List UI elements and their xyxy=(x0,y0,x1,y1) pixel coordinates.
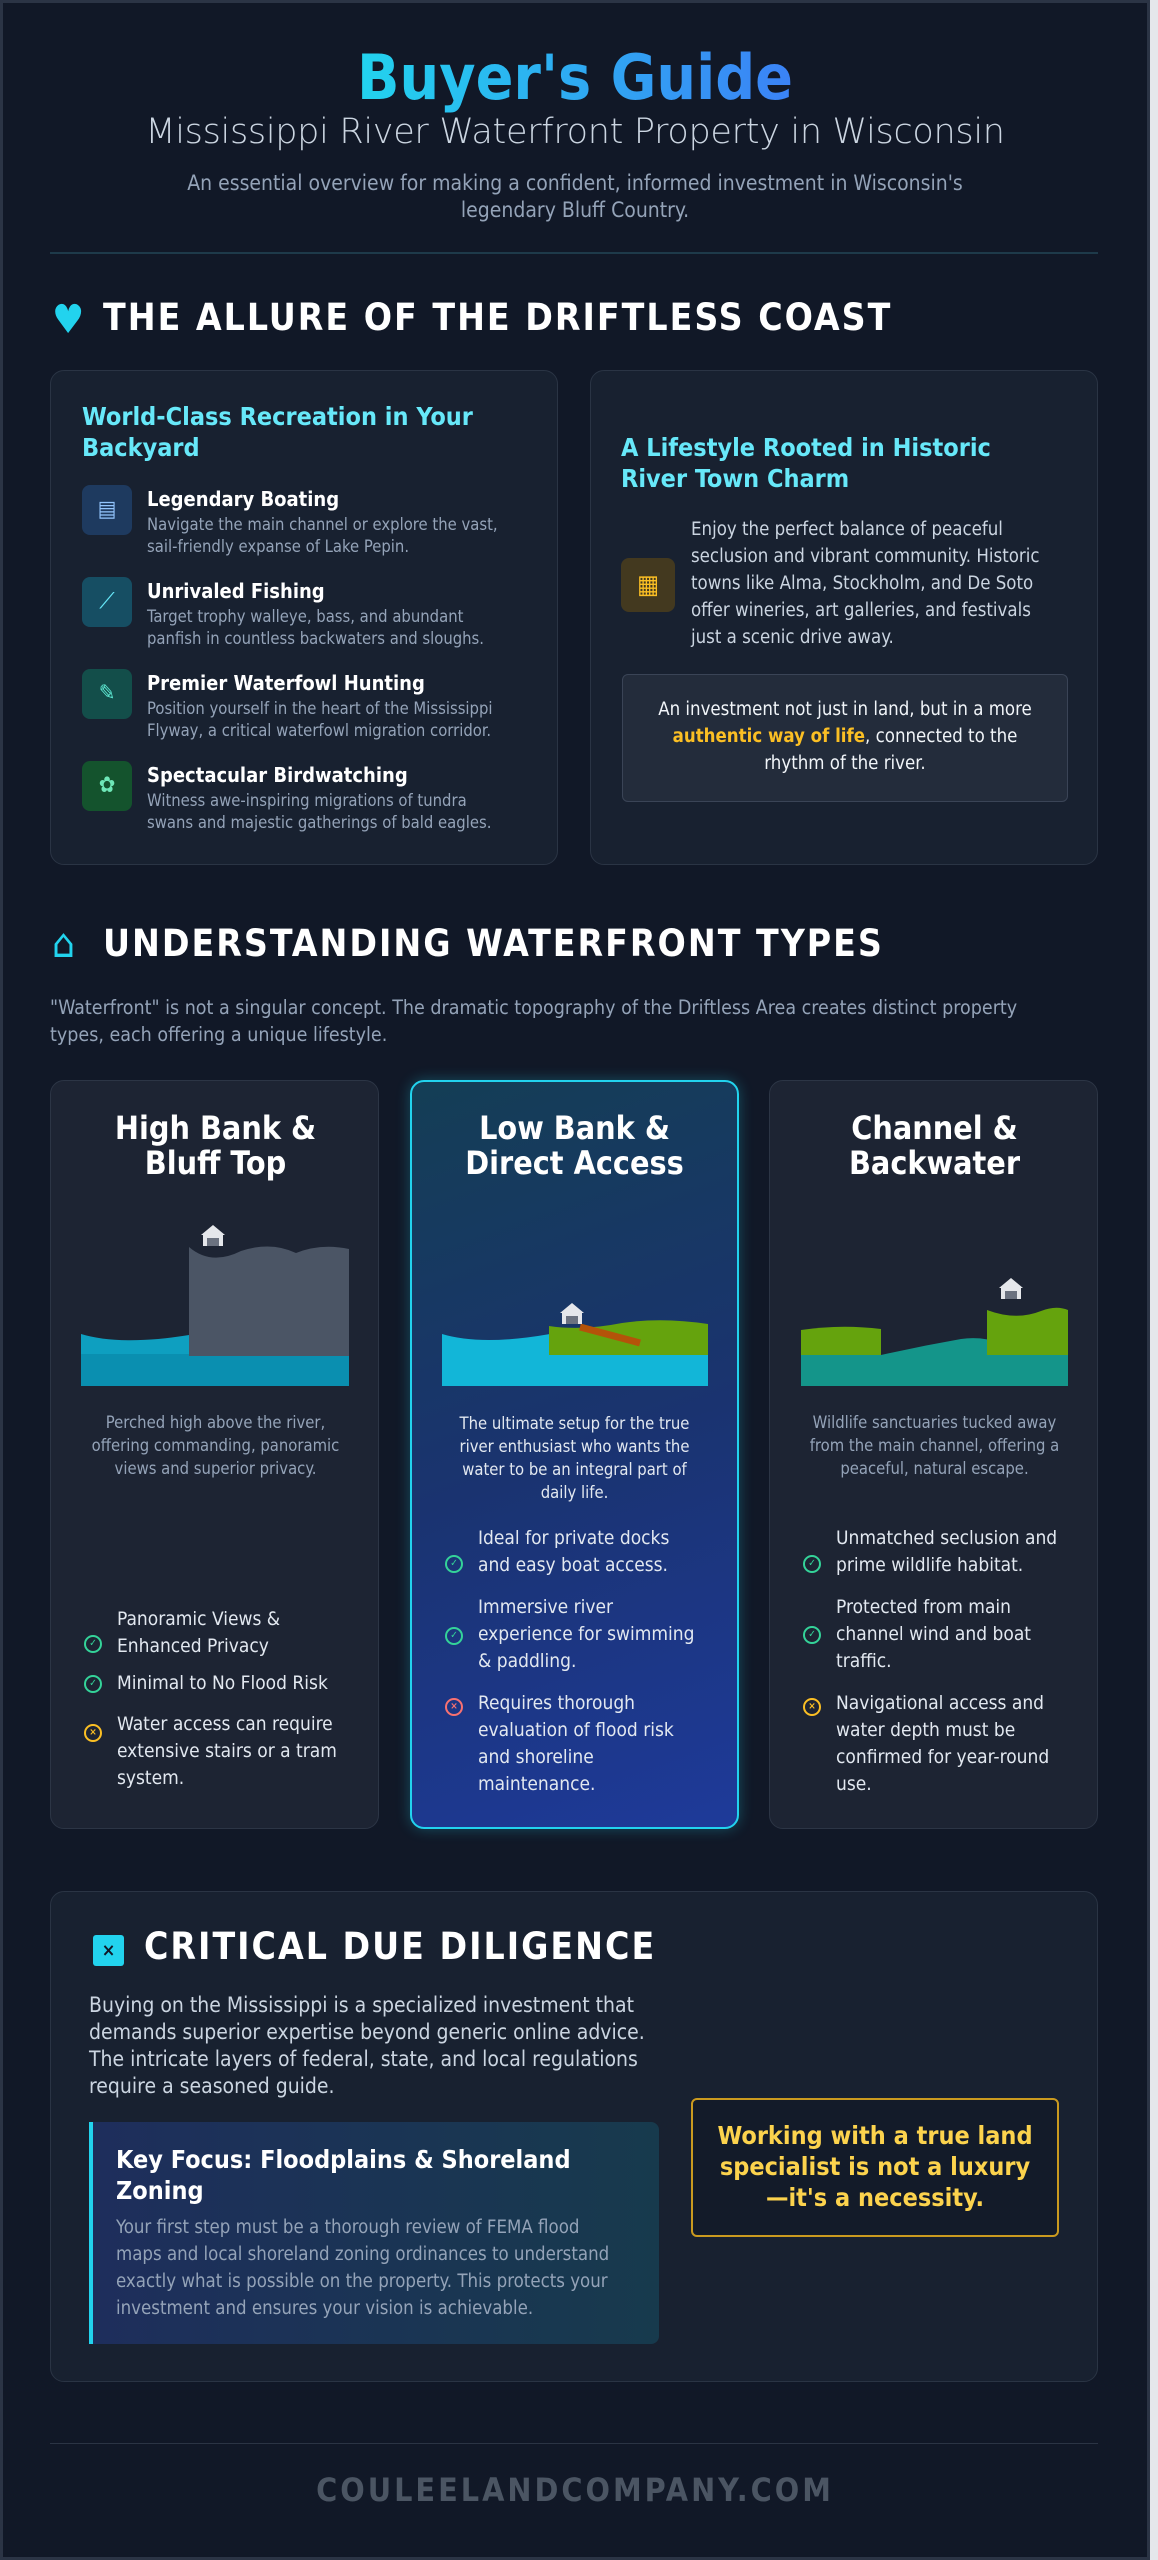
icon: x box: × xyxy=(102,1940,115,1961)
bullets: Unmatched seclusion and xyxy=(836,1527,1057,1549)
card title xyxy=(115,1109,316,1182)
card title xyxy=(465,1109,684,1182)
item: boating: Legendary Boating xyxy=(147,487,339,511)
subtitle: Mississippi River Waterfront Property in Wisconsin xyxy=(145,112,1005,152)
card description: Wildlife sanctuaries tucked away from the main channel, offering a peaceful, natural escape. xyxy=(810,1413,1059,1478)
intro paragraph: Buying on the Mississippi is a specialized investment that demands superior expertise beyond generic online advice. The intricate layers of federal, state, and local regulations require a seasoned guide. xyxy=(89,1993,645,2098)
icon: building: ▦ xyxy=(637,570,659,600)
bullets: prime wildlife habitat. xyxy=(836,1554,1023,1576)
callout: key focus: Key Focus: Floodplains & Shoreland Zoning xyxy=(116,2145,571,2205)
card title: Direct Access xyxy=(465,1144,684,1182)
bullets: Panoramic Views & xyxy=(117,1608,280,1630)
panel: recreation xyxy=(50,370,558,865)
bullets: water depth must be xyxy=(836,1719,1015,1741)
bullets: Navigational access and xyxy=(836,1692,1044,1714)
heading: due diligence: CRITICAL DUE DILIGENCE xyxy=(144,1925,656,1968)
icon: fishing xyxy=(82,577,132,627)
panel: high bank xyxy=(50,1080,379,1829)
card description: Perched high above the river, offering commanding, panoramic views and superior privacy. xyxy=(92,1413,339,1478)
item: hunting: Position yourself in the heart of the Mississippi Flyway, a critical waterfowl migration corridor. xyxy=(147,699,493,740)
card title: Channel & xyxy=(851,1109,1018,1147)
bullets: ✓ xyxy=(808,1629,816,1640)
callout: key focus: maps and local shoreland zoning ordinances to understand xyxy=(116,2244,609,2265)
panel: low bank (highlighted) xyxy=(410,1080,739,1829)
illustration: low bank xyxy=(442,1303,708,1386)
panel: channel & backwater xyxy=(769,1080,1098,1829)
icon: boat: ▤ xyxy=(98,497,116,522)
callout: key focus xyxy=(89,2122,659,2344)
item: fishing: Target trophy walleye, bass, and abundant panfish in countless backwaters and sloughs. xyxy=(147,607,484,648)
bullets xyxy=(803,1527,1057,1795)
icon: building xyxy=(621,558,675,612)
bullets: & paddling. xyxy=(478,1650,576,1672)
footer: COULEELANDCOMPANY.COM xyxy=(316,2471,834,2509)
bullets: evaluation of flood risk xyxy=(478,1719,674,1741)
bullets: maintenance. xyxy=(478,1773,595,1795)
icon: fishing: ⟋ xyxy=(99,589,115,614)
bullets: ✓ xyxy=(89,1678,97,1689)
item: hunting xyxy=(82,669,493,740)
bullets: Water access can require xyxy=(117,1713,333,1735)
icon: bird xyxy=(82,761,132,811)
item: fishing: Unrivaled Fishing xyxy=(147,579,325,603)
item: birdwatching: Witness awe-inspiring migrations of tundra swans and majestic gatherings of bald eagles. xyxy=(147,791,491,832)
section intro text xyxy=(50,996,1017,1046)
icon: hunting: ✎ xyxy=(99,681,115,706)
callout: key focus: investment and ensures your vision is achievable. xyxy=(116,2298,533,2319)
illustration: backwater xyxy=(801,1278,1068,1386)
bullets: use. xyxy=(836,1773,872,1795)
card title xyxy=(849,1109,1020,1182)
bullets: ✓ xyxy=(89,1638,97,1649)
card title: High Bank & xyxy=(115,1109,316,1147)
section heading: waterfront types: UNDERSTANDING WATERFRONT TYPES xyxy=(103,922,884,965)
item: boating xyxy=(82,485,498,556)
icon: x box xyxy=(93,1935,124,1966)
bullets: Ideal for private docks xyxy=(478,1527,669,1549)
bullets: extensive stairs or a tram xyxy=(117,1740,337,1762)
bullets: channel wind and boat xyxy=(836,1623,1031,1645)
illustration: bluff xyxy=(81,1225,349,1386)
panel: lifestyle xyxy=(590,370,1098,865)
bullets: × xyxy=(89,1727,97,1738)
bullets: Minimal to No Flood Risk xyxy=(117,1672,328,1694)
bullets: Protected from main xyxy=(836,1596,1011,1618)
bullets: × xyxy=(450,1701,458,1712)
callout: key focus: exactly what is possible on the property. This protects your xyxy=(116,2271,608,2292)
item: birdwatching: Spectacular Birdwatching xyxy=(147,763,408,787)
panel: due diligence xyxy=(50,1891,1098,2382)
callout: specialist: Working with a true land specialist is not a luxury —it's a necessity. xyxy=(717,2121,1033,2212)
title: Buyer's Guide xyxy=(357,41,793,114)
item: boating: Navigate the main channel or explore the vast, sail-friendly expanse of Lake Pepin. xyxy=(147,515,498,556)
icon: heart: ♥ xyxy=(52,297,84,343)
bullets xyxy=(84,1608,337,1789)
section intro text: "Waterfront" is not a singular concept. The dramatic topography of the Driftless Area creates distinct property xyxy=(50,996,1017,1019)
section intro text: types, each offering a unique lifestyle. xyxy=(50,1023,387,1046)
card description: The ultimate setup for the true river enthusiast who wants the water to be an integral part of daily life. xyxy=(460,1414,689,1502)
callout: quote xyxy=(622,674,1068,802)
bullets: and easy boat access. xyxy=(478,1554,668,1576)
bullets: ✓ xyxy=(450,1630,458,1641)
icon: boat xyxy=(82,485,132,535)
bullets: traffic. xyxy=(836,1650,892,1672)
bullets xyxy=(445,1527,694,1795)
bullets: Immersive river xyxy=(478,1596,613,1618)
bullets: Enhanced Privacy xyxy=(117,1635,269,1657)
intro text: An essential overview for making a confident, informed investment in Wisconsin's legendary Bluff Country. xyxy=(187,171,963,222)
callout: specialist xyxy=(691,2098,1059,2237)
item: hunting: Premier Waterfowl Hunting xyxy=(147,671,425,695)
heading: lifestyle: A Lifestyle Rooted in Historic River Town Charm xyxy=(621,433,991,493)
item: birdwatching xyxy=(82,761,491,832)
card title: Backwater xyxy=(849,1144,1020,1182)
icon: bird: ✿ xyxy=(99,773,115,798)
bullets: ✓ xyxy=(808,1558,816,1569)
icon: house: ⌂ xyxy=(52,921,75,967)
bullets: system. xyxy=(117,1767,184,1789)
bullets: experience for swimming xyxy=(478,1623,694,1645)
bullets: and shoreline xyxy=(478,1746,594,1768)
item: fishing xyxy=(82,577,484,648)
section heading: allure: THE ALLURE OF THE DRIFTLESS COAST xyxy=(103,296,892,339)
card title: Bluff Top xyxy=(145,1144,286,1182)
icon: hunting xyxy=(82,669,132,719)
callout: key focus: Your first step must be a thorough review of FEMA flood xyxy=(116,2217,579,2238)
lifestyle text: Enjoy the perfect balance of peaceful seclusion and vibrant community. Historic towns like Alma, Stockholm, and De Soto offer wineries, art galleries, and festivals just a scenic drive away. xyxy=(691,519,1040,648)
bullets: × xyxy=(808,1701,816,1712)
card title: Low Bank & xyxy=(479,1109,670,1147)
bullets: ✓ xyxy=(450,1558,458,1569)
bullets: confirmed for year-round xyxy=(836,1746,1049,1768)
heading: recreation: World-Class Recreation in Your Backyard xyxy=(82,402,473,462)
bullets: Requires thorough xyxy=(478,1692,635,1714)
callout: quote: An investment not just in land, but in a more authentic way of life, connected to the rhythm of the river. xyxy=(658,699,1032,774)
